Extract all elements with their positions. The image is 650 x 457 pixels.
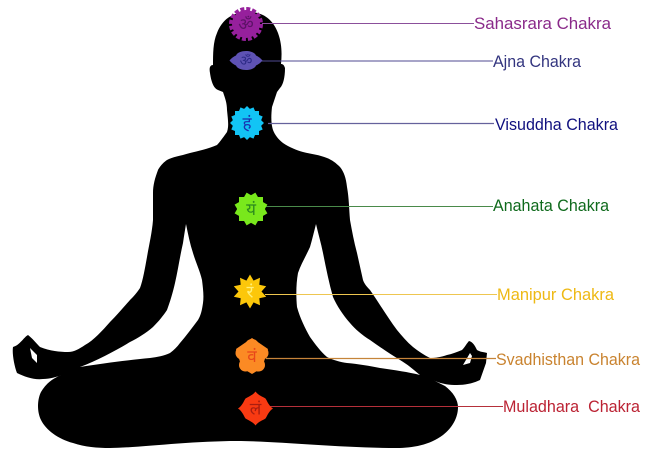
icon: Visuddha chakra: हं (242, 114, 252, 133)
icon: Ajna chakra: ॐ (240, 52, 253, 68)
icon: Svadhisthan chakra: वं (247, 347, 257, 366)
label: Muladhara Chakra: Muladhara Chakra (503, 398, 641, 416)
connector line: Visuddha (268, 122, 494, 124)
connector line: Sahasrara (262, 22, 474, 24)
icon: Svadhisthan chakra (236, 338, 268, 374)
icon: Muladhara chakra: लं (250, 400, 262, 418)
icon: Sahasrara chakra: ॐ (238, 15, 254, 34)
icon: Sahasrara chakra (231, 9, 261, 39)
icon: Visuddha chakra (230, 106, 264, 140)
label: Manipur Chakra: Manipur Chakra (497, 286, 615, 304)
label: Visuddha Chakra: Visuddha Chakra (495, 116, 619, 134)
icon: Ajna chakra (230, 51, 262, 70)
label: Anahata Chakra: Anahata Chakra (493, 197, 610, 215)
label: Svadhisthan Chakra: Svadhisthan Chakra (496, 351, 641, 369)
connector line: Ajna (260, 60, 493, 62)
icon: Muladhara chakra (238, 392, 273, 426)
icon: Anahata chakra (235, 193, 267, 225)
connector line: Anahata (266, 206, 493, 208)
icon: Anahata chakra: यं (246, 200, 257, 219)
label: Ajna Chakra: Ajna Chakra (493, 53, 582, 71)
meditating body silhouette (13, 12, 487, 448)
icon: Manipur chakra (234, 274, 266, 308)
icon: Manipur chakra: रं (247, 282, 255, 302)
connector line: Muladhara (270, 406, 503, 408)
connector line: Manipur (265, 294, 497, 296)
label: Sahasrara Chakra: Sahasrara Chakra (474, 15, 612, 33)
connector line: Svadhisthan (266, 358, 496, 360)
